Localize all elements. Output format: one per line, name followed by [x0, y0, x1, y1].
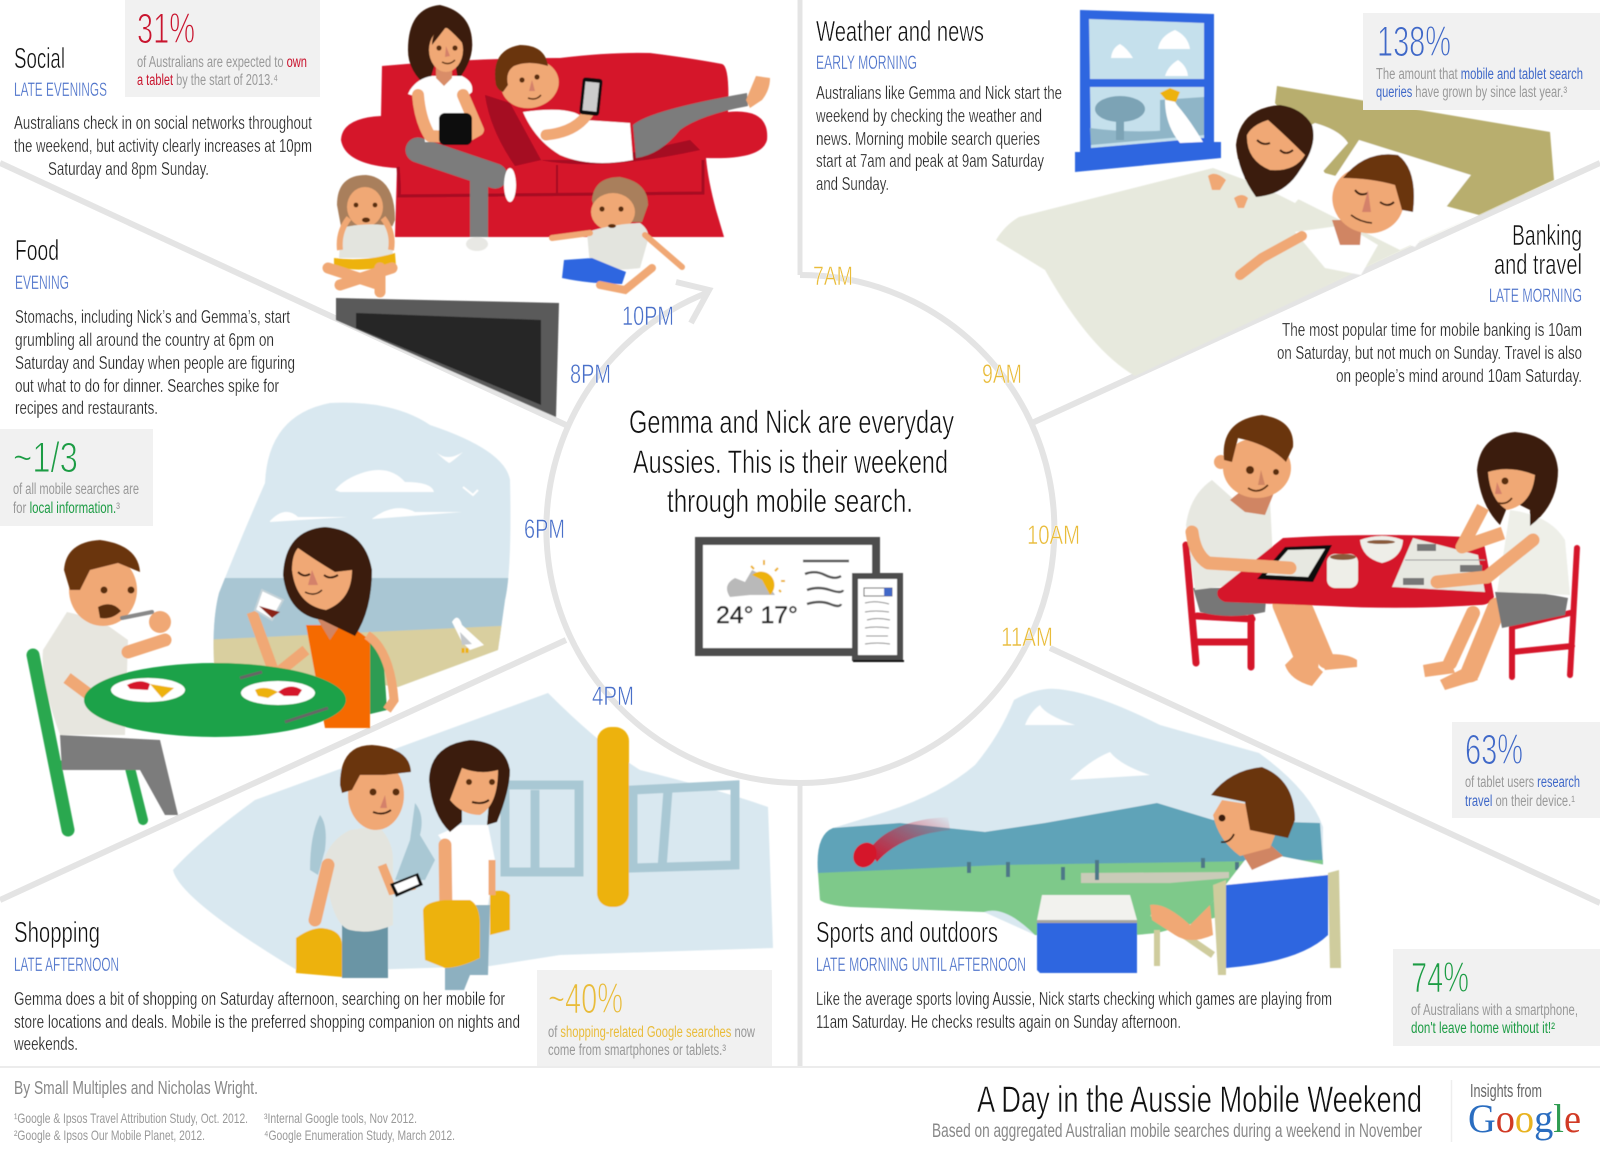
stat: 138%: 138%: [1377, 18, 1451, 66]
illustration: couple at breakfast table: [1186, 415, 1577, 690]
panel: food text: out what to do for dinner. Searches spike for: [15, 376, 279, 396]
stat: 63%: 63%: [1465, 726, 1523, 774]
panel: food text: grumbling all around the country at 6pm on: [15, 330, 274, 350]
stat: ~1/3: of all mobile searches are: [13, 481, 139, 498]
time labels: 10PM: [622, 301, 674, 331]
woman on sofa: [408, 5, 516, 251]
panel: social text: Australians check in on social networks throughout: [14, 113, 312, 133]
stat: 74%: [1393, 949, 1600, 1046]
stat: ~1/3: [0, 429, 153, 526]
panel: banking and travel text: [1277, 220, 1582, 386]
central heading: through mobile search.: [667, 483, 913, 519]
panel: social text: Social: [14, 43, 65, 75]
stat: 31%: a tablet by the start of 2013.⁴: [137, 72, 278, 89]
panel: food text: Stomachs, including Nick’s and Gemma’s, start: [15, 307, 290, 327]
time labels: 11AM: [1001, 622, 1053, 652]
stat: 31%: 31%: [137, 5, 195, 53]
stat: 138%: [1363, 13, 1600, 110]
footer credits: ²Google & Ipsos Our Mobile Planet, 2012.: [14, 1127, 205, 1143]
panel: social text: LATE EVENINGS: [14, 80, 107, 101]
girl: [328, 175, 396, 292]
stat: ~1/3: ~1/3: [13, 434, 78, 482]
time labels: [524, 261, 1080, 711]
panel: weather and news text: start at 7am and peak at 9am Saturday: [816, 151, 1044, 171]
panel: shopping text: LATE AFTERNOON: [14, 955, 119, 976]
illustration: sports and outdoors: [818, 689, 1341, 975]
time labels: 10AM: [1027, 520, 1080, 550]
logo: insights from Google: Google: [1468, 1096, 1581, 1141]
time labels: 6PM: [524, 514, 565, 544]
red table: [1217, 535, 1494, 608]
footer credits: ³Internal Google tools, Nov 2012.: [264, 1110, 417, 1126]
stat: ~40%: ~40%: [548, 975, 623, 1023]
panel: weather and news text: and Sunday.: [816, 174, 889, 194]
panel: social text: the weekend, but activity clearly increases at 10pm: [14, 136, 312, 156]
icon: monitor and tablet with weather: [699, 541, 904, 661]
stat: ~40%: come from smartphones or tablets.³: [548, 1042, 726, 1059]
panel: sports and outdoors text: Like the average sports loving Aussie, Nick starts checking which games are playing from: [816, 989, 1332, 1009]
panel: weather and news text: EARLY MORNING: [816, 53, 917, 74]
man at table: [1186, 415, 1357, 686]
icon: monitor and tablet with weather: 24° 17°: [716, 602, 798, 629]
panel: weather and news text: Weather and news: [816, 16, 984, 48]
stat: 74%: 74%: [1411, 954, 1469, 1002]
stat: 31%: of Australians are expected to own: [137, 54, 307, 71]
stat: 74%: don't leave home without it!²: [1411, 1020, 1555, 1037]
footer credits: [14, 1078, 455, 1143]
panel: food text: [15, 235, 295, 418]
footer credits: ¹Google & Ipsos Travel Attribution Study, Oct. 2012.: [14, 1110, 248, 1126]
footer credits: By Small Multiples and Nicholas Wright.: [14, 1078, 258, 1098]
woman shopping: [423, 740, 510, 990]
panel: social text: [14, 43, 312, 179]
stat: 63%: of tablet users research: [1465, 774, 1580, 791]
logo: insights from Google: Insights from: [1470, 1081, 1542, 1101]
stat: ~1/3: for local information.³: [13, 500, 120, 517]
illustration: couple shopping: [173, 693, 773, 990]
main title: A Day in the Aussie Mobile Weekend: [977, 1079, 1422, 1120]
panel: social text: Saturday and 8pm Sunday.: [48, 159, 209, 179]
panel: sports and outdoors text: 11am Saturday. He checks results again on Sunday afternoon.: [816, 1012, 1181, 1032]
panel: shopping text: Gemma does a bit of shopping on Saturday afternoon, searching on her mobile for: [14, 989, 505, 1009]
panel: sports and outdoors text: LATE MORNING UNTIL AFTERNOON: [816, 955, 1026, 976]
time labels: 9AM: [982, 359, 1022, 389]
arrow: clock ring head: [676, 282, 709, 323]
man on camp chair: [1150, 767, 1341, 975]
tablet and mugs: [1192, 532, 1485, 592]
panel: food text: Saturday and Sunday when people are figuring: [15, 353, 295, 373]
seagull: [452, 618, 484, 653]
panel: food text: Food: [15, 235, 59, 267]
stat: 63%: [1452, 722, 1600, 818]
stat: ~40%: of shopping-related Google searches now: [548, 1024, 756, 1041]
main title: Based on aggregated Australian mobile searches during a weekend in November: [932, 1121, 1422, 1142]
man dining: [33, 540, 178, 830]
woman at table: [1423, 432, 1570, 690]
cooler box: [1037, 895, 1137, 973]
panel: shopping text: weekends.: [13, 1034, 78, 1054]
boy: [552, 177, 682, 290]
man shopping: [296, 745, 423, 978]
panel: weather and news text: news. Morning mobile search queries: [816, 129, 1040, 149]
panel: shopping text: store locations and deals. Mobile is the preferred shopping companion on nights and: [14, 1012, 520, 1032]
time labels: 4PM: [592, 681, 634, 711]
footer credits: ⁴Google Enumeration Study, March 2012.: [264, 1127, 455, 1143]
panel: sports and outdoors text: Sports and outdoors: [816, 917, 998, 949]
illustration: couple asleep in bed: [996, 86, 1554, 376]
central heading: [629, 404, 954, 519]
panel: shopping text: [13, 917, 520, 1054]
man on sofa: [485, 45, 770, 166]
panel: food text: recipes and restaurants.: [15, 398, 158, 418]
panel: food text: EVENING: [15, 273, 69, 294]
woman dining: [252, 527, 394, 728]
panel: sports and outdoors text: [816, 917, 1332, 1032]
illustration: window with cockatoo: [1075, 10, 1221, 172]
stat: 31%: [125, 0, 320, 97]
illustration: couple dining at the beach: [33, 403, 520, 830]
panel: weather and news text: Australians like Gemma and Nick start the: [816, 83, 1062, 103]
stat: ~40%: [537, 970, 772, 1066]
sleeping woman: [1208, 105, 1314, 208]
central heading: Gemma and Nick are everyday: [629, 404, 954, 440]
panel: shopping text: Shopping: [14, 917, 100, 949]
green table with plates: [84, 663, 346, 737]
illustration: family on sofa: [328, 5, 770, 417]
central heading: Aussies. This is their weekend: [633, 444, 948, 480]
time labels: 7AM: [813, 261, 853, 291]
panel: weather and news text: [815, 16, 1062, 194]
panel: weather and news text: weekend by checking the weather and: [815, 106, 1042, 126]
time labels: 8PM: [570, 359, 611, 389]
sleeping man: [1240, 154, 1414, 275]
television: [336, 298, 559, 417]
footer rule: [0, 1066, 1600, 1068]
main title: [932, 1079, 1422, 1142]
